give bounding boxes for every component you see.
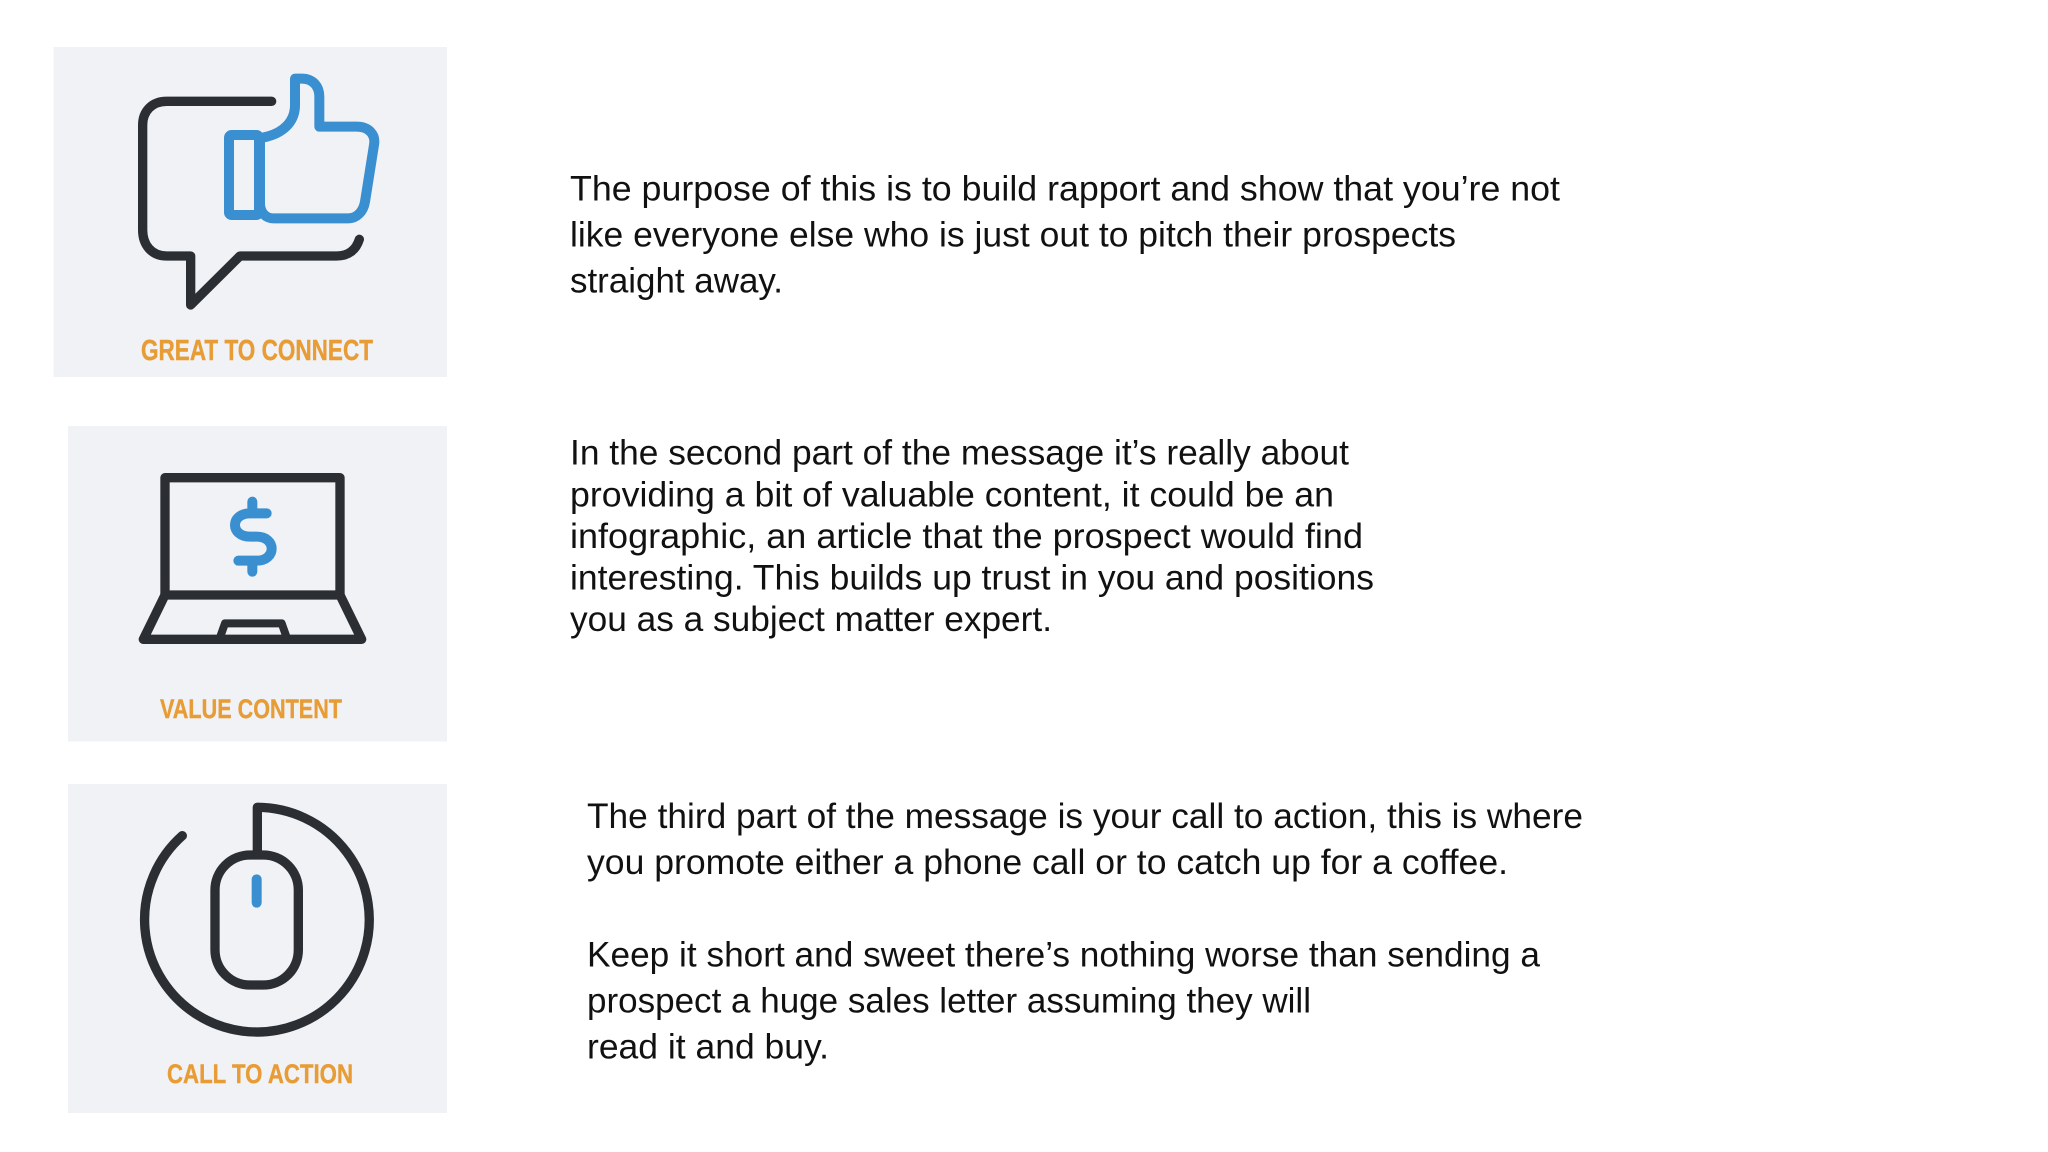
text block: call to action copy: Keep it short and sweet there’s nothing worse than sending a <box>587 936 1541 974</box>
icon: mouse inside power ring <box>145 807 369 1032</box>
text block: valuable content: providing a bit of valuable content, it could be an <box>570 476 1334 514</box>
text block: valuable content: infographic, an article that the prospect would find <box>570 517 1363 556</box>
text block: call to action copy: prospect a huge sales letter assuming they will <box>587 982 1311 1020</box>
label: great to connect: GREAT TO CONNECT <box>141 335 373 367</box>
text block: call to action copy: The third part of the message is your call to action, this is where <box>587 797 1583 836</box>
icon: speech bubble with thumbs up <box>143 79 374 305</box>
text block: valuable content <box>570 434 1374 639</box>
text block: valuable content: interesting. This builds up trust in you and positions <box>570 558 1374 598</box>
text block: valuable content: you as a subject matter expert. <box>570 600 1052 639</box>
text block: valuable content: In the second part of the message it’s really about <box>570 434 1349 472</box>
text block: call to action copy <box>587 797 1583 1066</box>
label: call to action: CALL TO ACTION <box>167 1059 353 1089</box>
text block: build rapport: like everyone else who is just out to pitch their prospects <box>570 216 1456 254</box>
text block: build rapport: straight away. <box>570 262 783 300</box>
panel: call to action <box>68 784 447 1113</box>
text block: call to action copy: you promote either a phone call or to catch up for a coffee. <box>587 843 1508 882</box>
panel: value content <box>68 426 447 742</box>
panel: great to connect <box>54 47 447 377</box>
label: value content: VALUE CONTENT <box>160 694 342 724</box>
text block: build rapport <box>570 170 1560 300</box>
text block: call to action copy: read it and buy. <box>587 1028 829 1066</box>
icon: laptop with dollar sign <box>143 478 362 639</box>
text block: build rapport: The purpose of this is to build rapport and show that you’re not <box>570 170 1560 208</box>
